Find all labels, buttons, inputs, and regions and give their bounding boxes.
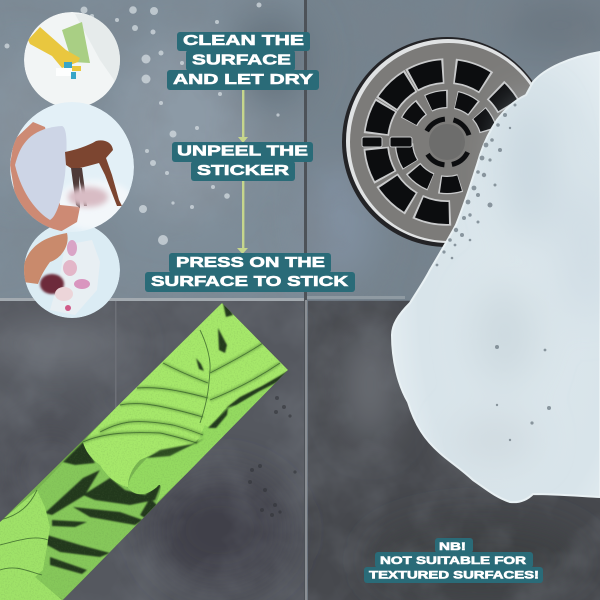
note: not suitable for textured surfaces: NOT SUITABLE FOR bbox=[380, 555, 526, 567]
step 2 label: STICKER bbox=[197, 162, 289, 179]
drain middle holes bbox=[386, 81, 508, 203]
drain outer holes bbox=[347, 42, 547, 242]
note: not suitable for textured surfaces: NB! bbox=[439, 541, 466, 553]
step 3 label bbox=[145, 253, 355, 292]
arrow: unpeel to press bbox=[237, 180, 248, 254]
step 1 label bbox=[167, 32, 319, 90]
big leaf bbox=[83, 303, 288, 487]
photo: cleaning the surface bbox=[24, 12, 121, 108]
step 2 label bbox=[172, 142, 313, 181]
photo: unpeeling the sticker bbox=[10, 102, 135, 235]
dark fronds bbox=[42, 442, 162, 600]
photo: pressing the sticker bbox=[23, 222, 120, 318]
drain middle hole highlights bbox=[386, 81, 508, 203]
sticker: green monstera leaf strip bbox=[0, 303, 288, 600]
drain hole highlights bbox=[347, 42, 547, 242]
step 2 label: UNPEEL THE bbox=[177, 142, 308, 160]
step 1 label: CLEAN THE bbox=[183, 32, 304, 49]
fold leaf bbox=[128, 425, 225, 503]
floor drain bbox=[342, 37, 552, 247]
drain inner slots bbox=[416, 111, 478, 173]
middle band under big leaf bbox=[36, 460, 158, 600]
step 3 label: PRESS ON THE bbox=[176, 254, 325, 271]
lower left leaf bbox=[0, 490, 62, 600]
arrow: clean to unpeel bbox=[238, 90, 248, 143]
dark leaf gaps bbox=[147, 303, 288, 458]
water droplets bbox=[4, 2, 280, 245]
step 1 label: AND LET DRY bbox=[173, 71, 313, 88]
step 3 label: SURFACE TO STICK bbox=[151, 273, 348, 290]
step 1 label: SURFACE bbox=[192, 52, 291, 68]
foam bbox=[392, 52, 600, 502]
note: not suitable for textured surfaces bbox=[364, 538, 543, 583]
right corner of big leaf lower bbox=[208, 376, 282, 439]
note: not suitable for textured surfaces: TEXTURED SURFACES! bbox=[369, 570, 539, 582]
